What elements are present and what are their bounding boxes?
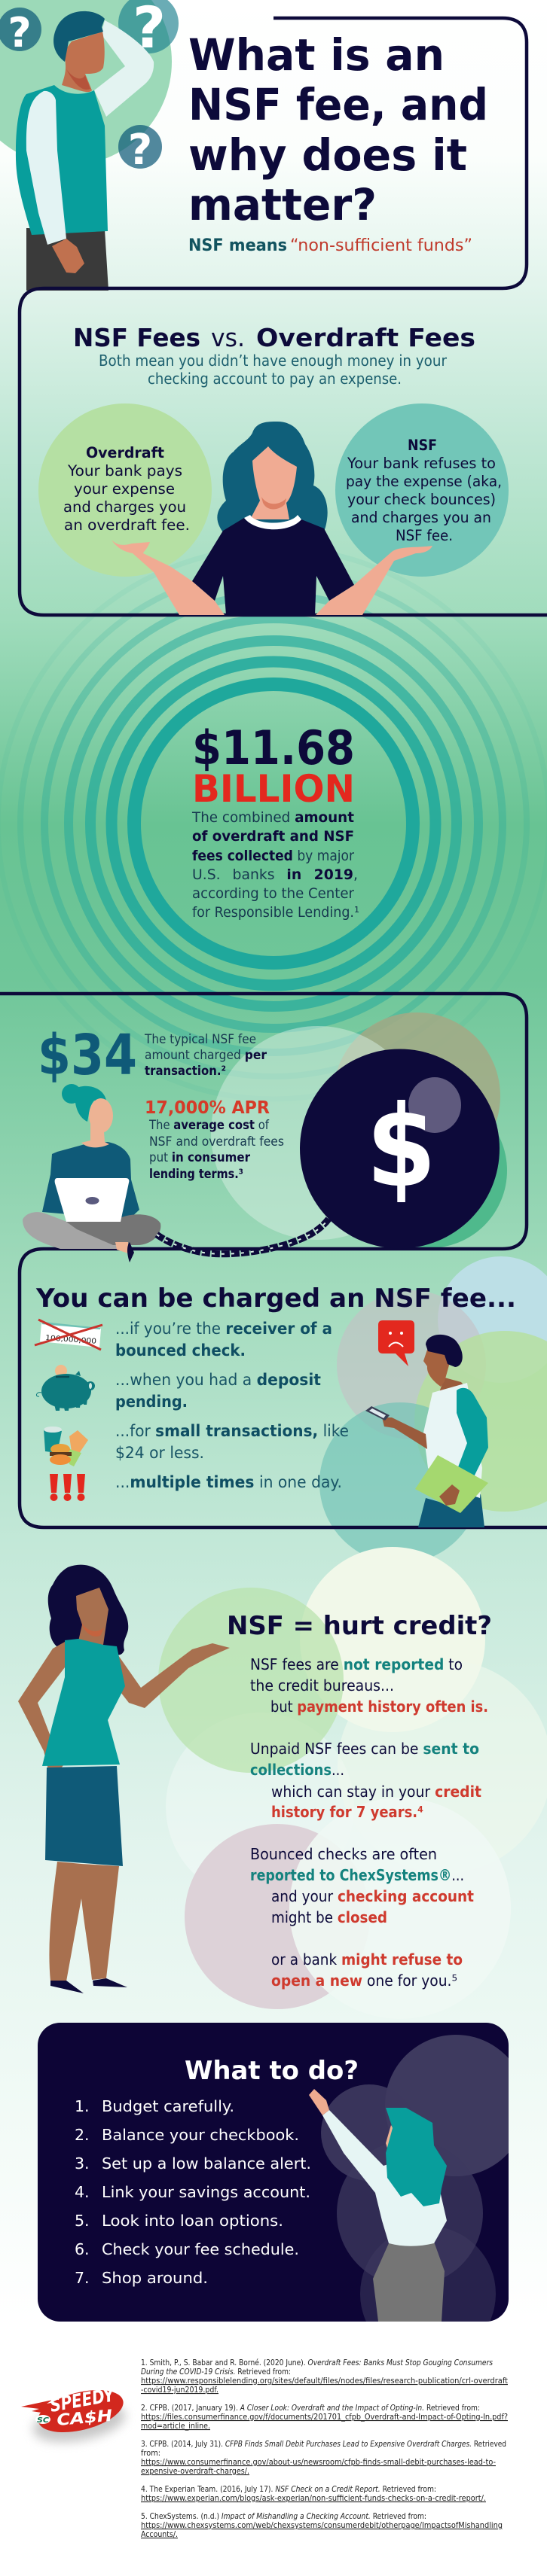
subtitle: “non-sufficient funds” [290,236,472,255]
text: not reported: but payment history often is. [270,1698,488,1716]
circle: overdraft [38,403,212,577]
panel: cost of fees [0,994,527,1249]
illustration: man with phone [365,1335,488,1527]
text: not reported: NSF fees are not reported to [250,1655,463,1673]
NSF definition: your check bounces) [347,491,496,508]
reason 1: bounced check. [115,1341,246,1360]
list of actions: 4. [75,2183,90,2201]
logo: Speedy Cash [21,2383,128,2448]
references: https://www.experian.com/blogs/ask-experian/non-sufficient-funds-checks-on-a-credit-report/. [141,2493,486,2503]
reason 1 [115,1320,332,1360]
text: ChexSystems: or a bank might refuse to [271,1950,463,1969]
APR text: lending terms.³ [149,1167,243,1182]
references: 3. CFPB. (2014, July 31). CFPB Finds Small Debit Purchases Lead to Expensive Overdraft Charges. Retrieved [141,2439,506,2449]
heading: What to do? [185,2056,359,2086]
references: During the COVID-19 Crisis. Retrieved from: [141,2367,291,2377]
illustration: woman raising arm [309,2089,447,2322]
icon: question mark lower [118,125,162,175]
illustration: confused man [16,11,154,291]
icon: piggy bank [36,1365,95,1411]
references: https://www.chexsystems.com/web/chexsystems/consumerdebit/otherpage/ImpactsofMishandling [141,2520,503,2530]
stat: 34 dollars: $34 [38,1023,137,1088]
list of actions: 7. [75,2269,90,2287]
icon: question mark left: ? [8,9,32,56]
logo: Speedy Cash: SPEEDY [48,2383,118,2416]
references: 1. Smith, P., S. Babar and R. Borné. (2020 June). Overdraft Fees: Banks Must Stop Gouging Consumers [141,2358,493,2367]
text: collections [250,1740,481,1821]
list of actions: Set up a low balance alert. [102,2154,311,2173]
intro text: checking account to pay an expense. [148,370,402,388]
circle: NSF [335,403,509,577]
list of actions: Look into loan options. [102,2212,283,2230]
reason 3 [115,1422,349,1462]
decorative circle teal [319,1402,481,1564]
title: NSF fee, and [188,79,488,130]
typical fee text: The typical NSF fee [144,1032,256,1047]
illustration: shrugging woman [112,422,432,615]
title: why does it [188,129,467,181]
illustration: ball with dollar sign: $ [366,1082,436,1213]
stat: 11.68 billion [191,720,359,921]
reason 2: pending. [115,1393,188,1411]
subtitle: NSF means [188,236,287,255]
decorative circle light blue [438,1256,547,1383]
text: collections: history for 7 years.⁴ [271,1803,423,1821]
icon: sad speech bubble [378,1320,414,1366]
illustration: standing woman [18,1565,230,1993]
heading: NSF = hurt credit? [227,1611,492,1641]
text: collections: collections... [250,1761,344,1779]
logo: Speedy Cash: CA$H [56,2407,114,2429]
NSF definition: Your bank refuses to [347,455,496,472]
NSF definition: NSF fee. [396,527,453,544]
APR text [148,1118,284,1182]
NSF definition: pay the expense (aka, [346,473,502,490]
panel background [38,2023,509,2322]
references: 2. CFPB. (2017, January 19). A Closer Look: Overdraft and the Impact of Opting-In. Retrieved from: [141,2403,480,2413]
references [141,2358,509,2539]
panel: you can be charged [20,1249,547,1564]
subtitle [188,236,472,255]
references: -covid19-jun2019.pdf. [141,2385,218,2395]
references: https://www.consumerfinance.gov/about-us/newsroom/cfpb-finds-small-debit-purchases-lead-to- [141,2457,496,2467]
list of actions: 6. [75,2240,90,2258]
backdrop circle [0,0,172,166]
comparison panel outline [20,288,547,615]
reason 1: ...if you’re the receiver of a [115,1320,332,1338]
decorative circles [158,1547,547,2019]
description: of overdraft and NSF [192,828,354,845]
icon: question mark left [0,8,41,56]
text: ChexSystems: might be closed [271,1908,387,1926]
references: mod=article_inline. [141,2421,210,2431]
text: ChexSystems: open a new one for you.⁵ [271,1972,457,1990]
description: according to the Center [192,885,354,902]
ripple rings [0,548,547,1099]
decorative circle pale [211,1026,425,1240]
references: 5. ChexSystems. (n.d.) Impact of Mishandling a Checking Account. Retrieved from: [141,2511,426,2521]
header panel outline [113,18,527,288]
heading: You can be charged an NSF fee... [35,1283,516,1314]
typical fee text [144,1032,267,1079]
chain [157,1218,329,1254]
overdraft definition [63,444,190,534]
panel: header [0,0,527,291]
icon: question mark top [118,0,179,61]
description: fees collected by major [192,848,354,864]
illustration: woman chained [23,1084,160,1262]
intro text: Both mean you didn’t have enough money in your [99,352,448,370]
references: https://files.consumerfinance.gov/f/documents/201701_cfpb_Overdraft-and-Impact-of-Opting-In.pdf? [141,2412,508,2422]
reason 2 [115,1371,321,1411]
list of actions: 1. [75,2097,90,2115]
typical fee text: amount charged per [145,1048,267,1063]
decorative circle tan [333,1012,500,1180]
reason 3: $24 or less. [115,1444,204,1462]
APR text: put in consumer [149,1150,251,1165]
title: What is an [188,29,445,81]
list of actions: Budget carefully. [102,2097,234,2115]
references: Accounts/. [141,2529,178,2539]
list of actions [75,2097,311,2287]
references: https://www.responsiblelending.org/sites/default/files/nodes/files/research-publication/crl-overdraft [141,2376,509,2386]
APR text: NSF and overdraft fees [149,1134,284,1149]
panel: NSF fees vs overdraft fees [20,288,547,615]
icon: exclamation marks [50,1474,85,1501]
text: ChexSystems [250,1845,474,1990]
overdraft definition: Overdraft [86,444,164,461]
title [188,29,488,230]
text: ChexSystems: and your checking account [271,1887,474,1905]
heading: NSF Fees [73,323,200,352]
NSF definition: NSF [408,437,437,454]
decorative circles [321,2035,509,2322]
text: ChexSystems: reported to ChexSystems®... [250,1866,464,1884]
list of actions: Shop around. [102,2269,208,2287]
heading: Overdraft Fees [256,323,475,352]
intro text [99,352,448,388]
heading [73,323,475,352]
charged panel outline [20,1249,547,1527]
references: expensive-overdraft-charges/. [141,2466,249,2476]
APR text: The average cost of [148,1118,270,1133]
reason 2: ...when you had a deposit [115,1371,321,1389]
NSF definition: and charges you an [351,509,491,526]
references: 4. The Experian Team. (2016, July 17). NSF Check on a Credit Report. Retrieved from: [141,2484,436,2494]
billion label: BILLION [192,767,355,811]
icon: bounced check: 100,000,000 [45,1334,96,1346]
panel: what to do [38,2023,509,2322]
list of actions: 3. [75,2154,90,2173]
list of actions: Check your fee schedule. [102,2240,299,2258]
list of actions: Link your savings account. [102,2183,310,2201]
panel: NSF hurt credit [18,1547,547,2019]
icon: fast food [44,1427,88,1466]
illustration: ball with dollar sign [300,1049,500,1248]
icon: bounced check [35,1320,102,1350]
typical fee text: transaction.² [145,1064,226,1079]
description: The combined amount [191,809,354,826]
reason 3: ...for small transactions, like [115,1422,349,1440]
list of actions: Balance your checkbook. [102,2126,299,2144]
references: from: [141,2448,160,2458]
overdraft definition: and charges you [63,498,186,516]
decorative circle green [352,1093,507,1248]
text: not reported: the credit bureaus... [250,1676,394,1694]
overdraft definition: an overdraft fee. [64,516,190,534]
list of actions: 5. [75,2212,90,2230]
icon: question mark lower: ? [128,126,152,175]
stat: 17,000% APR: 17,000% APR [145,1098,270,1118]
description: U.S. banks in 2019, [192,866,358,883]
text: ChexSystems: Bounced checks are often [250,1845,437,1863]
reason 4: ...multiple times in one day. [115,1473,342,1491]
cost panel outline [0,994,527,1249]
decorative circle mauve [337,1290,486,1439]
text: not reported [250,1655,488,1716]
text: collections: which can stay in your credit [271,1783,481,1801]
title: matter? [188,179,377,230]
heading: vs. [211,323,245,352]
decorative circle green [414,1331,547,1512]
description [191,809,359,921]
description: for Responsible Lending.¹ [192,904,359,921]
NSF definition [346,437,502,544]
text: collections: Unpaid NSF fees can be sent to [250,1740,479,1758]
overdraft definition: your expense [74,480,175,498]
big number: $11.68 [192,720,355,775]
overdraft definition: Your bank pays [67,462,182,480]
list of actions: 2. [75,2126,90,2144]
logo: Speedy Cash: SC [37,2416,50,2425]
